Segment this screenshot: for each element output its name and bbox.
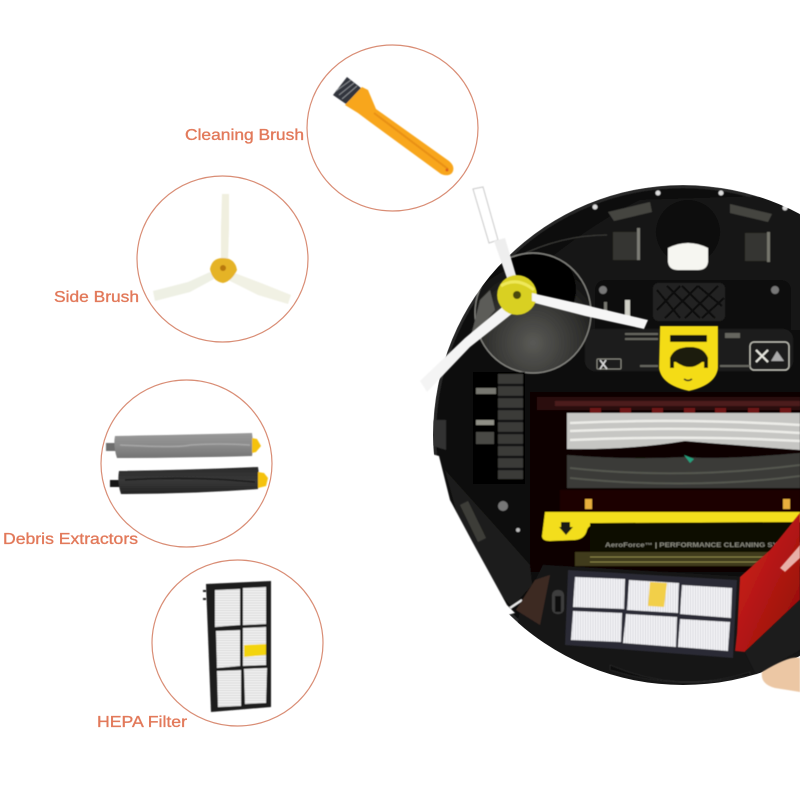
red handle — [735, 513, 800, 652]
label: side brush: Side Brush — [54, 289, 139, 306]
panel: debris extractors — [101, 380, 272, 547]
icon: black roller — [110, 467, 268, 494]
icon: HEPA filter — [203, 581, 271, 712]
performance text strip — [590, 523, 800, 552]
label: cleaning brush: Cleaning Brush — [185, 127, 304, 144]
circle outline: side brush — [137, 176, 308, 342]
robot vacuum underside — [415, 185, 800, 700]
circle outline: cleaning brush — [307, 45, 478, 211]
lower bay — [575, 552, 800, 566]
circle outline: debris extractors — [101, 380, 272, 547]
robot body: AeroForce™ | PERFORMANCE CLEANING SYSTEM — [605, 542, 800, 549]
filter in robot — [565, 570, 737, 658]
yellow tag — [659, 326, 718, 391]
module compartment — [530, 392, 800, 572]
silhouette cutout: lower left — [415, 452, 515, 625]
center plate — [595, 280, 791, 332]
white roller — [567, 413, 800, 450]
dark roller — [567, 453, 800, 488]
hand — [762, 658, 800, 692]
panel: cleaning brush — [307, 45, 478, 211]
bumper sensors — [608, 202, 652, 221]
red bristles — [537, 397, 800, 410]
yellow latch bar — [542, 512, 800, 541]
compartment shelf — [560, 490, 800, 512]
lower left bumper parts — [445, 470, 532, 607]
body top shading — [470, 195, 800, 330]
side brush on robot — [420, 187, 648, 392]
panel: HEPA filter — [152, 560, 323, 726]
lower right dark bay — [745, 600, 800, 674]
robot body — [430, 185, 800, 700]
label: debris extractors: Debris Extractors — [3, 531, 138, 548]
caster wheel — [656, 200, 720, 256]
filter bay — [518, 564, 800, 685]
label sticker — [585, 329, 793, 371]
left wedge highlight — [471, 290, 496, 333]
yellow tabs — [585, 499, 592, 509]
sensor windows — [613, 232, 637, 260]
circle outline: HEPA filter — [152, 560, 323, 726]
label: HEPA filter: HEPA Filter — [97, 714, 188, 731]
side wheel — [473, 372, 525, 484]
panel: side brush — [137, 176, 308, 342]
handle highlight — [780, 545, 800, 572]
icon: grey roller — [106, 433, 261, 458]
icon: side brush — [153, 194, 291, 304]
icon: cleaning brush — [333, 77, 453, 175]
brush well — [475, 253, 591, 373]
rim screws — [592, 204, 598, 210]
